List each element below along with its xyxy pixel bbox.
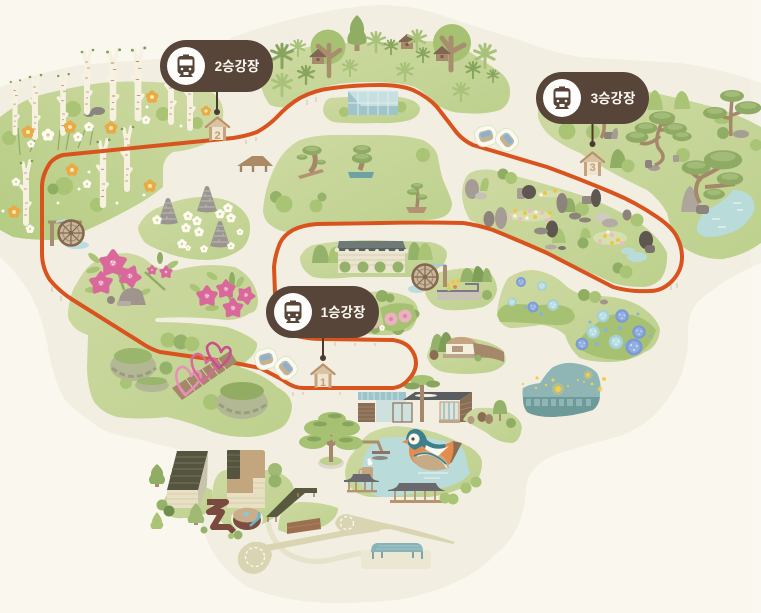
small trunk xyxy=(601,122,604,138)
icon: pod building xyxy=(231,507,263,531)
heart railings xyxy=(176,343,231,395)
panel: hydrangea zone xyxy=(497,270,660,362)
greenhouse building xyxy=(348,91,398,115)
icon: bridge with hearts xyxy=(172,343,237,400)
pine by building xyxy=(404,375,440,422)
icon: water wheel left xyxy=(48,220,89,249)
station sign 2 xyxy=(206,118,229,142)
trees and shrubs around halls xyxy=(149,463,282,540)
icon: conifer xyxy=(347,15,367,51)
station sign 1: 1 xyxy=(320,377,326,389)
building: center hall xyxy=(227,450,265,508)
icon: large pine xyxy=(299,412,363,469)
shrubs xyxy=(558,90,761,172)
teal bench xyxy=(371,543,423,559)
dark walkway xyxy=(266,488,317,522)
icons: huts xyxy=(310,35,450,64)
icon: tree left xyxy=(310,30,346,76)
orange flowers xyxy=(8,90,211,218)
pond xyxy=(697,190,754,237)
shrub and rock xyxy=(578,289,608,304)
pink flowers xyxy=(372,310,412,331)
stone circle small xyxy=(135,377,169,392)
stone circle left xyxy=(110,348,156,381)
icon: water wheel center xyxy=(408,264,447,293)
panel: bonsai zone xyxy=(263,135,452,232)
rocks xyxy=(604,128,749,214)
birch trees xyxy=(10,46,197,223)
panel: azalea and stone wall zone xyxy=(68,251,292,437)
bonsai 2 xyxy=(348,145,374,178)
large pavilion xyxy=(388,483,446,503)
station sign 1 xyxy=(312,364,334,389)
small pavilion xyxy=(344,474,379,492)
panel: lower building greenery xyxy=(162,470,294,529)
panel: water wheel garden xyxy=(408,264,497,310)
leaves and stems xyxy=(85,251,246,312)
shrubs xyxy=(480,168,644,278)
station sign 2: 2 xyxy=(214,130,221,142)
white flowers around pagodas xyxy=(152,203,243,253)
callout: platform 1 xyxy=(266,286,379,361)
panel: pine and pond zone xyxy=(538,90,761,259)
white flowers xyxy=(2,106,182,233)
brown deck xyxy=(287,518,321,534)
small pond xyxy=(621,248,647,262)
flower beds xyxy=(508,189,627,245)
callout: platform 1: 1승강장 xyxy=(321,305,366,320)
road and turnarounds xyxy=(238,514,455,574)
main building xyxy=(358,375,472,423)
panel: stone pagoda zone xyxy=(138,186,250,260)
panel: lower right plaza xyxy=(238,488,455,574)
callout: platform 2: 2승강장 xyxy=(215,59,260,74)
shrubs xyxy=(120,332,219,410)
azalea flowers xyxy=(91,252,256,316)
icon: wooden pavilion xyxy=(237,156,273,172)
panel: birch forest zone xyxy=(0,46,223,240)
bonsai 1 xyxy=(297,146,326,179)
callout: platform 3: 3승강장 xyxy=(591,91,636,106)
icons: trains at upper-right xyxy=(473,123,522,155)
panel: top tropical forest xyxy=(260,15,510,114)
pond water xyxy=(360,437,470,497)
bonsai 3 xyxy=(406,183,427,213)
icon: firefly pond xyxy=(522,363,606,417)
shrubs xyxy=(270,148,430,212)
station sign 3: 3 xyxy=(589,162,596,174)
icon: mandarin duck xyxy=(402,429,462,478)
panel: pink flower garden xyxy=(350,290,420,335)
station sign 3 xyxy=(581,152,604,176)
panel: greenhouse xyxy=(323,91,420,123)
callout: platform 2 xyxy=(160,40,273,115)
icon: zigzag brick path xyxy=(207,502,234,532)
icons: trains at bottom-left xyxy=(253,346,301,383)
rocks xyxy=(84,107,105,117)
rocks xyxy=(107,288,146,306)
pad xyxy=(361,550,431,569)
pine B xyxy=(703,90,761,136)
pine C xyxy=(682,150,743,203)
grass stems xyxy=(18,128,93,155)
shrubs xyxy=(440,476,482,504)
route: train line xyxy=(42,85,682,396)
panel: duck pond xyxy=(344,426,482,504)
right edge strip xyxy=(751,0,761,613)
callout: platform 3 xyxy=(536,72,649,147)
rocks xyxy=(465,179,655,253)
palms xyxy=(272,30,499,101)
icon: coffee cup xyxy=(359,458,373,479)
hydrangea blooms xyxy=(508,277,652,356)
panel: jar garden xyxy=(463,400,522,443)
building: left hall xyxy=(167,451,208,508)
light path xyxy=(268,522,362,561)
stone circle right xyxy=(216,382,268,419)
panel: hanok wall zone xyxy=(300,240,447,278)
icon: tree right xyxy=(433,24,471,70)
panel: thatched house xyxy=(427,332,506,374)
panel: rock garden xyxy=(462,168,667,287)
pine A xyxy=(626,111,692,165)
small pier xyxy=(362,442,390,460)
hanok wall xyxy=(335,241,408,273)
shrubs in forest xyxy=(2,101,203,212)
